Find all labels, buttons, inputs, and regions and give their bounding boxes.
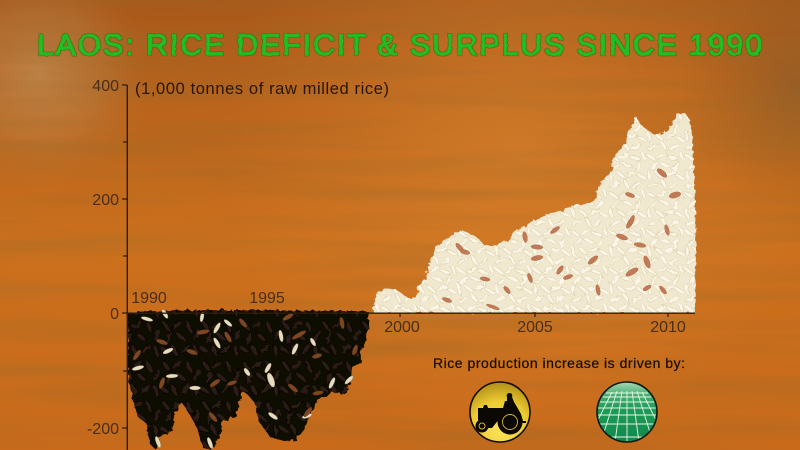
red grains [442,167,682,311]
icon: irrigated field grid [596,381,658,443]
tractor wheel hubs [479,414,518,430]
drivers heading: Rice production increase is driven by: [433,355,685,371]
black rice shape [128,310,369,450]
y axis labels: 400 [92,78,119,95]
x axis labels: 2000 [384,319,420,336]
tractor silhouette [476,393,526,434]
x axis labels: 2010 [650,319,686,336]
x axis [127,313,695,317]
surplus area: white rice [373,113,696,313]
y axis labels: 0 [110,306,119,323]
brown grains [132,312,359,423]
grid lines [598,390,656,441]
x axis labels: 2005 [517,319,553,336]
y axis labels [87,78,119,438]
white rice shape [373,113,696,313]
title: LAOS: RICE DEFICIT & SURPLUS SINCE 1990 [37,29,762,62]
x axis labels [131,290,686,336]
icon: tractor [470,382,530,442]
y axis labels: 200 [92,192,119,209]
deficit area: black rice [128,309,369,450]
y axis labels: -200 [87,421,119,438]
x axis labels: 1990 [131,290,167,307]
y axis [122,85,128,450]
unit note: (1,000 tonnes of raw milled rice) [135,80,389,98]
x axis labels: 1995 [249,290,285,307]
pale grains [132,309,354,449]
